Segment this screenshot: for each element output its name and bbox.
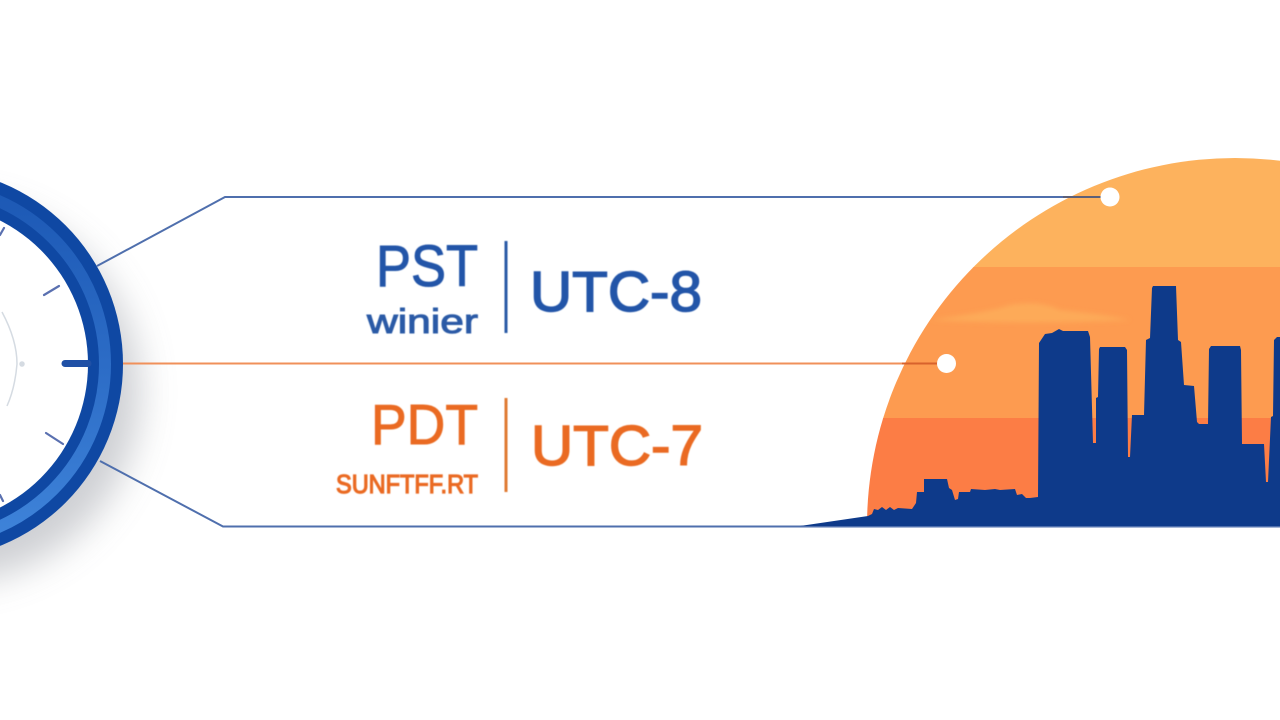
- heading: PDT: PDT: [371, 393, 478, 457]
- clock ticks: minor: [0, 228, 63, 501]
- sun disc: [860, 150, 1280, 528]
- label: summer: SUNFTFF.RT: [336, 469, 478, 499]
- callout frame: upper line: [97, 197, 1110, 266]
- sun cloud streak: [949, 304, 1114, 322]
- line segments over sun: [902, 197, 1105, 364]
- divider: [504, 241, 508, 333]
- city skyline: [800, 286, 1280, 526]
- value: UTC-8: UTC-8: [530, 260, 702, 324]
- heading: PST: PST: [376, 234, 478, 299]
- panel: PST winter: [366, 234, 702, 341]
- callout frame: middle orange line: [123, 362, 947, 364]
- infographic canvas: [0, 158, 1280, 592]
- callout frame: lower line: [100, 461, 1280, 526]
- marker: lower dot: [937, 354, 956, 373]
- marker: upper dot: [1100, 188, 1120, 206]
- icon: clock: [0, 168, 140, 582]
- panel: PDT summer: [336, 393, 703, 499]
- value: UTC-7: UTC-7: [531, 414, 703, 478]
- divider: [504, 398, 508, 492]
- label: winter: winier: [366, 303, 478, 341]
- clock tick: 3 o'clock: [65, 360, 88, 367]
- clock inner arc: [2, 312, 24, 406]
